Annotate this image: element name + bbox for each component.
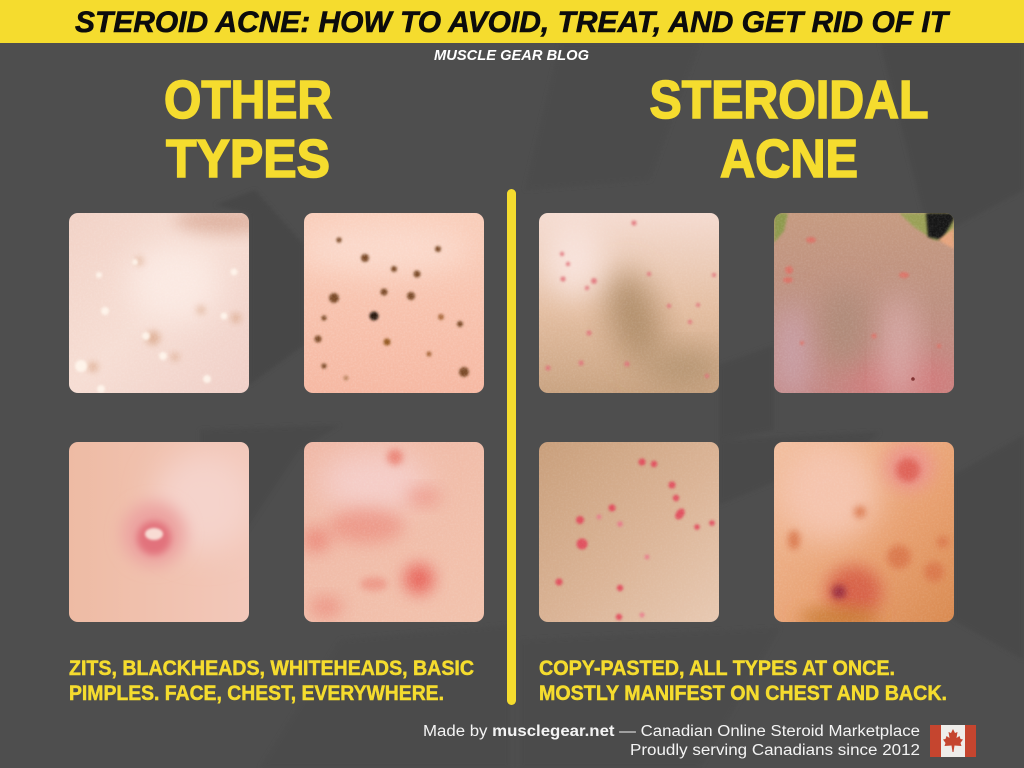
caption: steroidal acne [539, 657, 947, 705]
icon: Canadian flag [930, 725, 976, 757]
photo: inflamed acne [774, 442, 954, 628]
heading: steroidal acne: STEROIDAL [650, 70, 928, 130]
photo: chest acne [539, 213, 724, 393]
footer credit [423, 723, 920, 759]
footer credit: Proudly serving Canadians since 2012 [630, 742, 920, 759]
photo: whiteheads [69, 213, 249, 393]
footer credit: Made by musclegear.net — Canadian Online Steroid Marketplace [423, 723, 920, 740]
central divider [507, 189, 516, 705]
photo: back acne [774, 213, 954, 393]
caption: steroidal acne: MOSTLY MANIFEST ON CHEST AND BACK. [539, 682, 947, 705]
title banner [0, 0, 1024, 43]
photo: blackheads [294, 213, 484, 393]
caption: other types: PIMPLES. FACE, CHEST, EVERYWHERE. [69, 682, 444, 705]
photo: rash [302, 442, 484, 622]
caption: other types [69, 657, 474, 705]
heading: steroidal acne: ACNE [720, 129, 858, 189]
subtitle: MUSCLE GEAR BLOG [434, 47, 589, 64]
heading: other types: TYPES [166, 129, 330, 189]
heading: other types [164, 70, 332, 189]
heading: steroidal acne [650, 70, 928, 189]
photo: red spots [539, 442, 719, 622]
heading: other types: OTHER [164, 70, 332, 130]
caption: steroidal acne: COPY-PASTED, ALL TYPES AT ONCE. [539, 657, 895, 680]
caption: other types: ZITS, BLACKHEADS, WHITEHEADS, BASIC [69, 657, 474, 680]
photo: red pimple [69, 442, 254, 622]
title banner: STEROID ACNE: HOW TO AVOID, TREAT, AND GET RID OF IT [75, 6, 951, 39]
